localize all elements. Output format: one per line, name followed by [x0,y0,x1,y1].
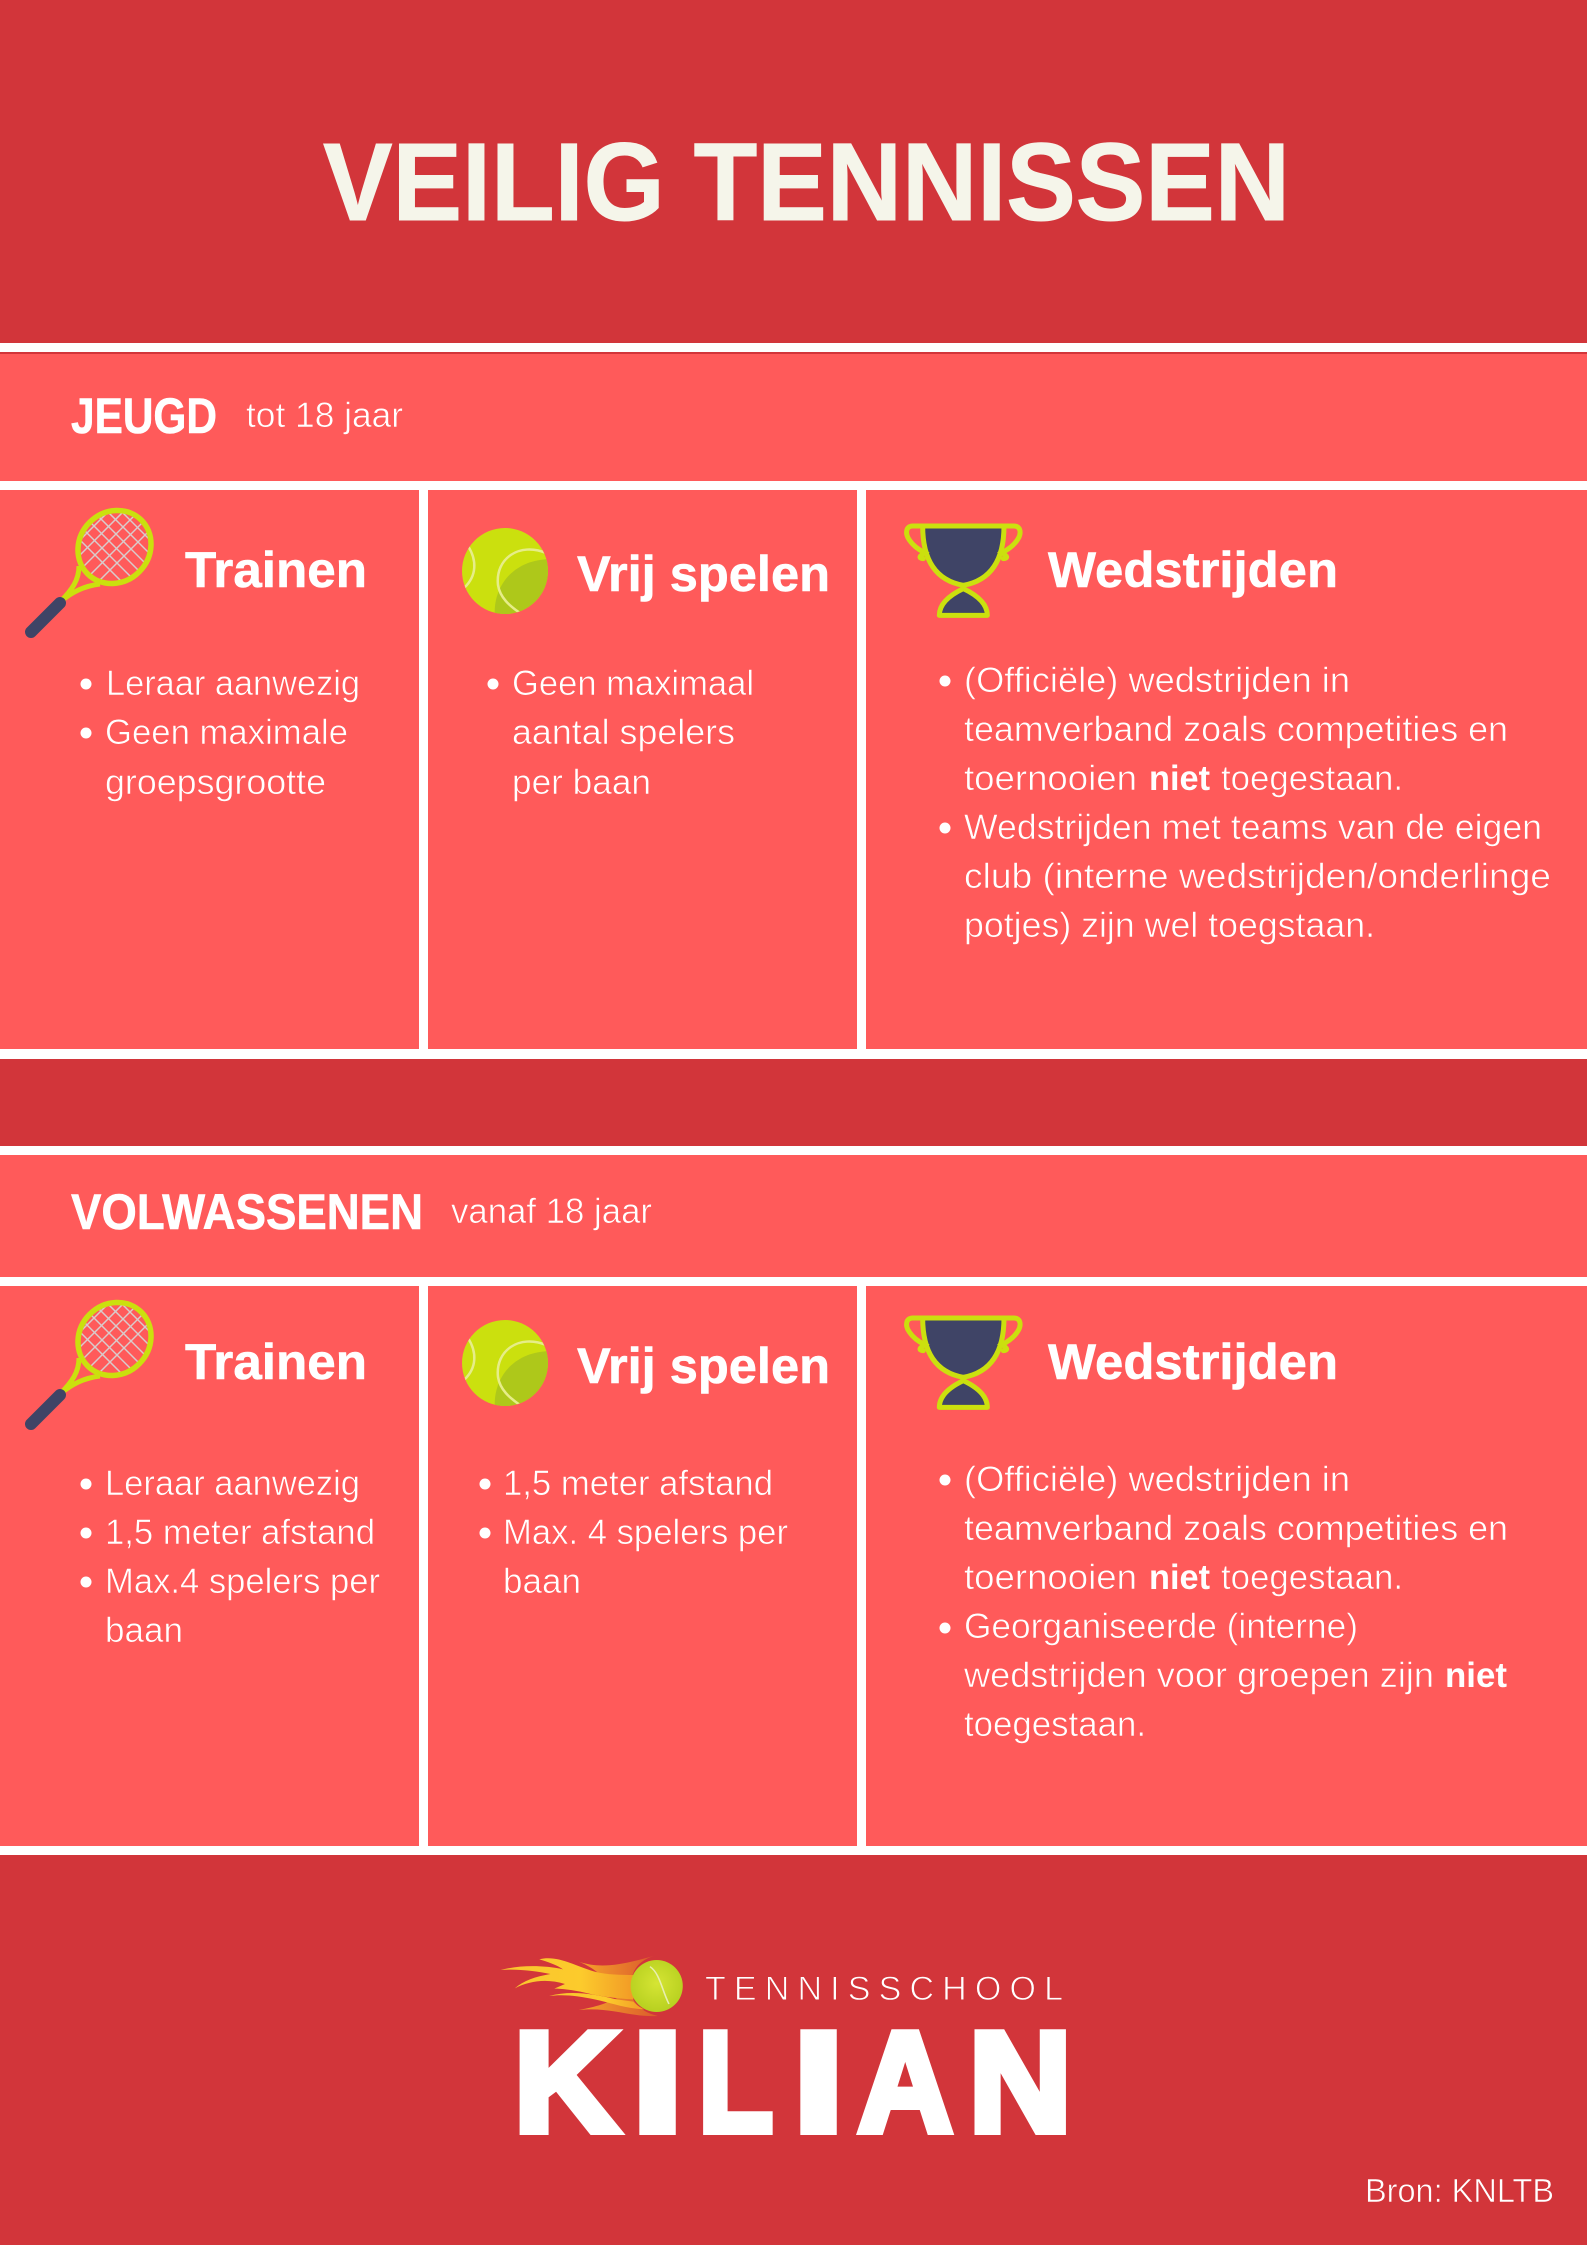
icon: trophy [907,1318,1020,1407]
list: wedstrijden rules: toernooien [964,1558,1137,1597]
list: vrij spelen rules: baan [503,1562,581,1601]
panel: jeugd vrij spelen [428,490,857,1049]
source note: Bron: KNLTB [1365,2172,1554,2209]
heading: vrij spelen: Vrij spelen [577,546,830,602]
heading: trainen: Trainen [185,1334,367,1390]
icon: tennis racket [31,450,238,632]
heading: wedstrijden: Wedstrijden [1048,542,1338,598]
list: wedstrijden rules: potjes) zijn wel toegstaan. [964,906,1375,945]
list: wedstrijden rules: niet [1445,1656,1507,1695]
icon: flaming tennis ball [501,1956,683,2016]
list: wedstrijden rules: Wedstrijden met teams van de eigen [964,808,1542,847]
icon: tennis ball [462,1320,552,1414]
panel: volwassenen trainen [0,1242,419,1846]
list: wedstrijden rules: toegestaan. [1221,759,1403,798]
list: vrij spelen rules [488,664,754,802]
list: trainen rules [80,1464,380,1650]
list: trainen rules: baan [105,1611,183,1650]
list: wedstrijden rules: niet [1149,759,1210,798]
list: wedstrijden rules: club (interne wedstrijden/onderlinge [964,857,1551,896]
logo text: kilian: I [793,2003,844,2162]
list: wedstrijden rules: toegestaan. [964,1705,1146,1744]
icon: tennis racket [31,1242,238,1424]
section header band: volwassenen [0,1155,1587,1277]
heading: vrij spelen: Vrij spelen [577,1338,830,1394]
list: trainen rules: Geen maximale [105,713,348,752]
list: wedstrijden rules [940,1460,1508,1744]
list: trainen rules: 1,5 meter afstand [105,1513,375,1552]
list: vrij spelen rules: aantal spelers [512,713,735,752]
list: trainen rules: Leraar aanwezig [106,664,360,703]
logo text: kilian: K [514,2003,618,2162]
subheading: vanaf 18 jaar: vanaf 18 jaar [451,1192,652,1231]
list: wedstrijden rules: teamverband zoals competities en [964,710,1508,749]
heading: jeugd: JEUGD [71,388,217,444]
heading: wedstrijden: Wedstrijden [1048,1334,1338,1390]
logo text: kilian: L [698,2003,773,2162]
list: wedstrijden rules: toernooien [964,759,1137,798]
list: wedstrijden rules: wedstrijden voor groepen zijn [963,1656,1434,1695]
panel: jeugd trainen [0,450,419,1049]
panel: volwassenen [0,1155,1587,1846]
list: vrij spelen rules: Geen maximaal [512,664,754,703]
list: wedstrijden rules: Georganiseerde (interne) [964,1607,1358,1646]
list: wedstrijden rules: toegestaan. [1221,1558,1403,1597]
logo text: kilian: I [632,2003,683,2162]
logo text: kilian: N [969,2003,1072,2162]
panel: volwassenen vrij spelen [428,1286,857,1846]
list: vrij spelen rules: per baan [512,763,651,802]
list: wedstrijden rules [940,661,1551,945]
icon: trophy [907,526,1020,615]
list: vrij spelen rules: 1,5 meter afstand [503,1464,773,1503]
heading: volwassenen: VOLWASSENEN [71,1184,423,1240]
list: trainen rules [80,664,360,802]
title: VEILIG TENNISSEN [323,121,1290,244]
heading: trainen: Trainen [185,542,367,598]
list: trainen rules: groepsgrootte [105,763,326,802]
list: vrij spelen rules: Max. 4 spelers per [503,1513,788,1552]
section header band: jeugd [0,354,1587,481]
panel: jeugd wedstrijden [866,490,1587,1049]
list: wedstrijden rules: niet [1149,1558,1210,1597]
list: wedstrijden rules: teamverband zoals competities en [964,1509,1508,1548]
panel: jeugd [0,354,1587,1049]
panel: volwassenen wedstrijden [866,1286,1587,1846]
logo: tennisschool kilian [501,1956,1072,2162]
list: trainen rules: Leraar aanwezig [105,1464,360,1503]
logo text: kilian: A [858,2003,952,2162]
list: wedstrijden rules: (Officiële) wedstrijden in [964,1460,1350,1499]
list: wedstrijden rules: (Officiële) wedstrijden in [964,661,1350,700]
icon: tennis ball [462,528,552,622]
subheading: tot 18 jaar: tot 18 jaar [246,396,403,435]
logo text: tennisschool: TENNISSCHOOL [705,1970,1063,2008]
list: trainen rules: Max.4 spelers per [105,1562,380,1601]
list: vrij spelen rules [480,1464,788,1601]
